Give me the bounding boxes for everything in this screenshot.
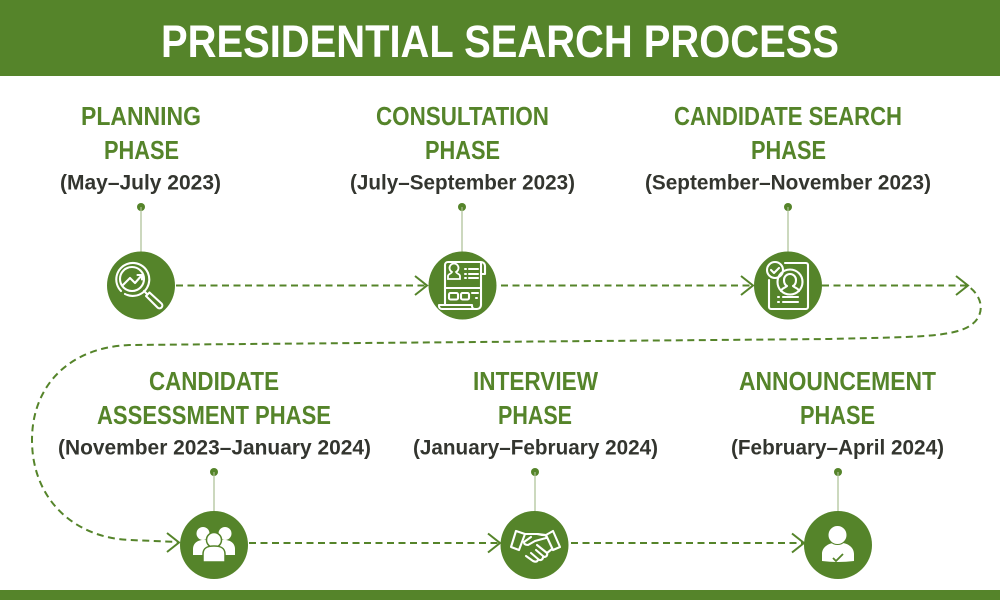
dashed arrow: interview to announcement: [571, 534, 804, 552]
dashed arrow: consultation to candidate search: [501, 276, 753, 295]
heading: announcement phase: PHASE: [800, 400, 875, 430]
connector: candidate search phase: [784, 203, 792, 252]
step: planning phase: [60, 101, 221, 320]
heading: planning phase: PHASE: [104, 135, 179, 165]
step: candidate search phase: [645, 101, 931, 320]
dates: consultation phase: (July–September 2023): [350, 170, 575, 194]
heading: announcement phase: ANNOUNCEMENT: [739, 366, 936, 396]
heading: interview phase: PHASE: [498, 400, 572, 430]
dates: planning phase: (May–July 2023): [60, 170, 221, 194]
icon: group of people: [180, 511, 248, 579]
heading: candidate search phase: [674, 101, 902, 165]
icon: magnifying glass with rising chart: [107, 252, 175, 320]
dashed arrow: candidate search to candidate assessment, winding between rows: [32, 276, 981, 552]
heading: announcement phase: [739, 366, 936, 430]
heading: interview phase: [473, 366, 598, 430]
header band: [0, 0, 1000, 76]
heading: candidate search phase: PHASE: [751, 135, 826, 165]
heading: candidate assessment phase: [97, 366, 331, 430]
step: consultation phase: [350, 101, 575, 320]
icon: resume with check badge: [754, 252, 822, 320]
dashed arrow: candidate assessment to interview: [249, 534, 500, 552]
connector: announcement phase: [834, 468, 842, 511]
heading: candidate assessment phase: CANDIDATE: [149, 366, 279, 396]
footer band: [0, 590, 1000, 600]
heading: consultation phase: CONSULTATION: [376, 101, 549, 131]
icon: document with profile: [428, 252, 496, 320]
heading: candidate search phase: CANDIDATE SEARCH: [674, 101, 902, 131]
dates: interview phase: (January–February 2024): [413, 436, 658, 460]
connector: candidate assessment phase: [210, 468, 218, 511]
step: announcement phase: [731, 366, 944, 579]
connector: consultation phase: [458, 203, 466, 252]
icon: handshake: [500, 511, 568, 579]
step: candidate assessment phase: [58, 366, 371, 579]
heading: consultation phase: [376, 101, 549, 165]
heading: interview phase: INTERVIEW: [473, 366, 598, 396]
heading: consultation phase: PHASE: [425, 135, 500, 165]
heading: planning phase: [81, 101, 201, 165]
dashed arrow: planning to consultation: [176, 276, 427, 295]
dates: candidate assessment phase: (November 2023–January 2024): [58, 436, 371, 460]
title: PRESIDENTIAL SEARCH PROCESS: [161, 16, 839, 67]
dates: candidate search phase: (September–November 2023): [645, 170, 931, 194]
connector: interview phase: [531, 468, 539, 511]
heading: planning phase: PLANNING: [81, 101, 201, 131]
icon: person with check mark: [804, 511, 872, 579]
dates: announcement phase: (February–April 2024): [731, 436, 944, 460]
connector: planning phase: [137, 203, 145, 252]
heading: candidate assessment phase: ASSESSMENT PHASE: [97, 400, 331, 430]
step: interview phase: [413, 366, 658, 579]
